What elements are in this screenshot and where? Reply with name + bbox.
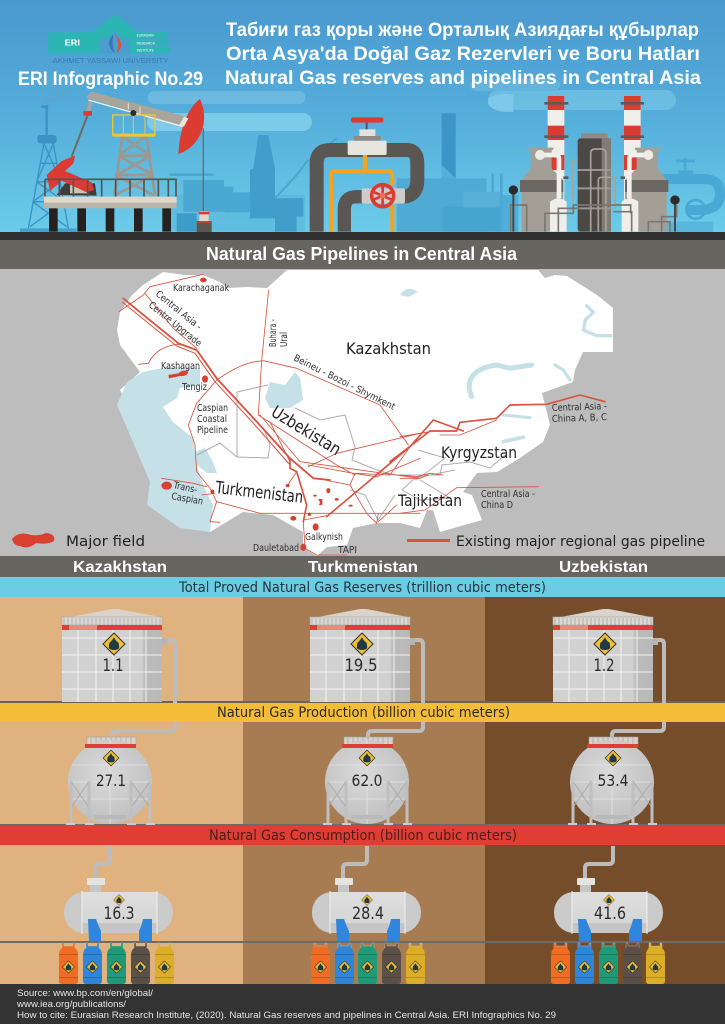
panel: reserves band [0, 577, 725, 597]
map labels: Caspian [170, 491, 204, 508]
reserves tank: Turkmenistan [310, 609, 415, 702]
country labels [214, 339, 517, 510]
title block: Natural Gas reserves and pipelines in Central Asia [225, 67, 701, 89]
gas bottles: Turkmenistan [311, 943, 425, 984]
title block: Orta Asya'da Doğal Gaz Rezervleri ve Boru Hatları [226, 43, 700, 65]
reserves tank: Uzbekistan: 1.2 [594, 656, 614, 676]
country labels: Kazakhstan [346, 339, 431, 358]
panel: map [0, 269, 725, 556]
production sphere: Turkmenistan [323, 737, 412, 825]
infographic number: ERI Infographic No.29 [18, 68, 203, 90]
country header row: Uzbekistan [559, 559, 648, 576]
reserves tank: Kazakhstan [62, 609, 167, 702]
gas bottles: Uzbekistan [551, 943, 665, 984]
map labels: Central Asia - [552, 401, 607, 414]
production sphere: Kazakhstan: 27.1 [96, 771, 126, 790]
reserves tank: Turkmenistan: 19.5 [344, 656, 378, 676]
country header row: Kazakhstan [73, 559, 167, 576]
blue factory at left of derrick [20, 173, 250, 232]
panel: reserves band: Total Proved Natural Gas Reserves (trillion cubic meters) [178, 580, 546, 596]
map labels: Dauletabad [253, 543, 299, 554]
panel: production band [0, 703, 725, 722]
icon: blue valve [663, 158, 720, 232]
map labels [146, 283, 607, 556]
map labels: Central Asia - [153, 289, 204, 333]
reserves tank: Kazakhstan: 1.1 [102, 656, 124, 676]
icon: pipes and valves [317, 117, 417, 232]
production sphere: Kazakhstan [66, 737, 155, 825]
gas fields [161, 278, 353, 551]
country borders [197, 385, 505, 520]
logo: Eurasian Research Institute: ERI [65, 39, 80, 48]
map labels: Beineu - Bozoi - Shymkent [292, 353, 397, 413]
production sphere: Uzbekistan [568, 737, 657, 825]
column backgrounds [0, 597, 725, 984]
legend: major field: Major field [66, 534, 145, 550]
lakes and Caspian Sea [117, 289, 418, 532]
production sphere: Turkmenistan: 62.0 [352, 771, 382, 790]
country header row [0, 556, 725, 578]
clouds [147, 79, 676, 131]
city silhouette [167, 94, 513, 232]
country header row: Turkmenistan [308, 559, 418, 576]
logo: Eurasian Research Institute: RESEARCH [137, 41, 156, 45]
map labels: Buhara - [268, 319, 279, 347]
footer: sources and citation: Source: www.bp.com/en/global/ [17, 988, 153, 999]
panel: production band: Natural Gas Production (billion cubic meters) [217, 705, 510, 721]
map labels: Karachaganak [173, 283, 229, 294]
logo: Eurasian Research Institute: EURASIAN [137, 34, 154, 38]
chimneys [544, 96, 644, 232]
storage tank: Turkmenistan: 28.4 [352, 904, 384, 923]
map labels: Kashagan [161, 361, 200, 372]
map labels: Pipeline [197, 425, 228, 436]
logo: Eurasian Research Institute: INSTITUTE [137, 49, 155, 53]
production sphere: Uzbekistan: 53.4 [598, 771, 628, 790]
gas bottles: Kazakhstan [59, 943, 174, 984]
title block: Табиғи газ қоры және Орталық Азиядағы құбырлар [226, 19, 699, 41]
footer: sources and citation: www.iea.org/publications/ [16, 999, 126, 1010]
footer: sources and citation [0, 984, 725, 1024]
map labels: Ural [279, 332, 290, 347]
country labels: Turkmenistan [214, 478, 304, 508]
map labels: Caspian [197, 403, 228, 414]
footer: sources and citation: How to cite: Eurasian Research Institute, (2020). Natural Gas reserves and pipelines in Central Asia. ERI Infographics No. 29 [17, 1010, 556, 1021]
country labels: Tajikistan [397, 491, 462, 510]
storage tank: Kazakhstan [64, 878, 173, 941]
header banner [0, 0, 725, 240]
reserves tank: Uzbekistan [553, 609, 658, 702]
country labels: Kyrgyzstan [441, 443, 517, 462]
land mass [117, 270, 613, 556]
panel: consumption band [0, 826, 725, 845]
map labels: Centre Upgrade [146, 300, 204, 349]
legend: pipeline: Existing major regional gas pipeline [456, 534, 705, 550]
connecting pipes [95, 640, 664, 880]
panel: consumption band: Natural Gas Consumption (billion cubic meters) [209, 828, 517, 844]
map heading: Natural Gas Pipelines in Central Asia [206, 244, 518, 264]
map heading [0, 240, 725, 269]
map labels: China A, B, C [552, 412, 607, 425]
map labels: Tengiz [181, 382, 207, 393]
storage tank: Turkmenistan [312, 878, 421, 941]
icon: refinery [500, 96, 720, 232]
storage tank: Uzbekistan [554, 878, 663, 941]
title block [225, 19, 701, 89]
icon: pump jack [44, 92, 212, 232]
map labels: Coastal [197, 414, 227, 425]
map labels: Central Asia - [481, 489, 535, 500]
map labels: TAPI [337, 545, 357, 556]
country labels: Uzbekistan [267, 402, 344, 460]
storage tank: Kazakhstan: 16.3 [104, 904, 134, 923]
legend: major field [12, 533, 145, 550]
ground [0, 232, 725, 240]
map labels: Galkynish [305, 532, 343, 543]
pipelines [119, 274, 463, 555]
storage tank: Uzbekistan: 41.6 [594, 904, 626, 923]
map labels: Trans- [172, 480, 198, 496]
logo: Eurasian Research Institute [48, 14, 172, 65]
logo: Eurasian Research Institute: AKHMET YASSAWI UNIVERSITY [53, 56, 168, 65]
icon: flare tower [28, 89, 70, 228]
map labels: China D [481, 500, 513, 511]
